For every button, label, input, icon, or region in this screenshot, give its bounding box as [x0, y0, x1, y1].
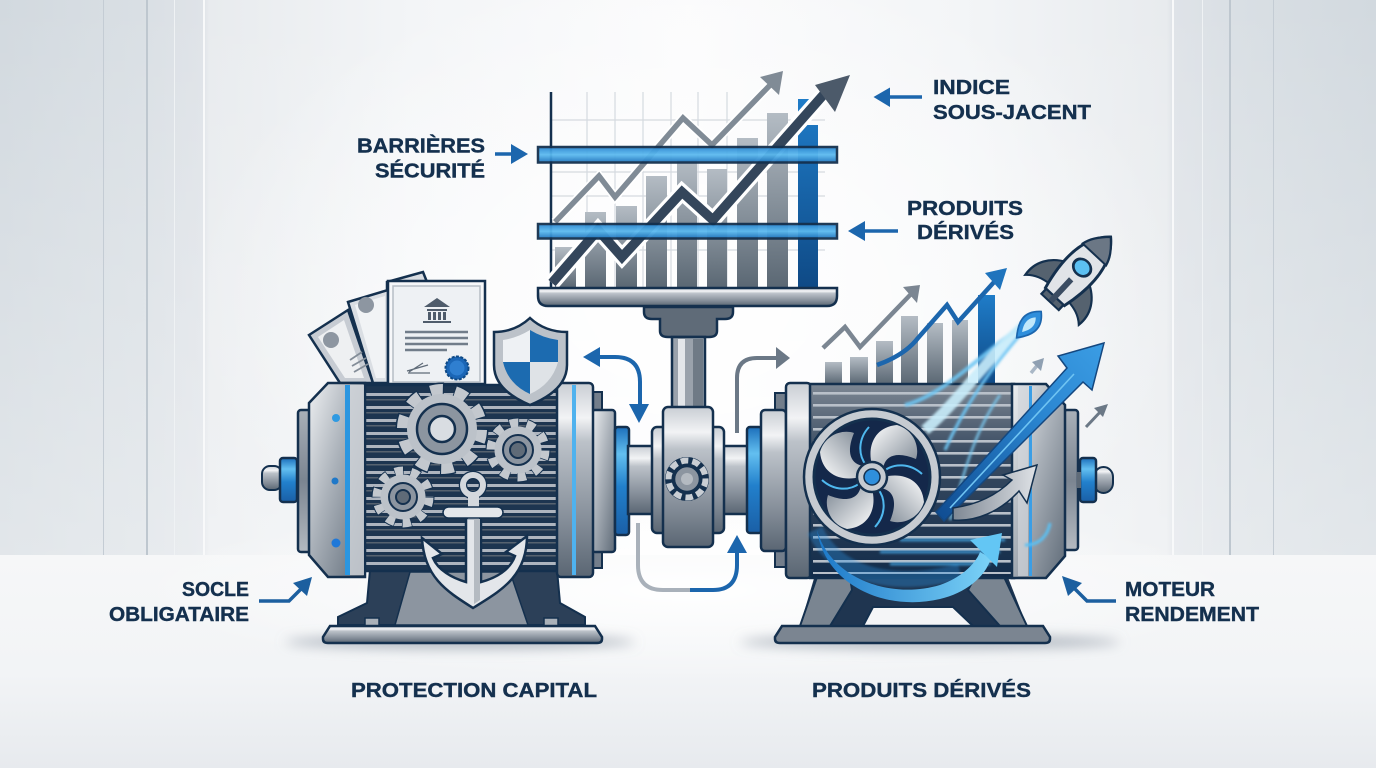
right inner blue collar of left engine — [615, 427, 629, 535]
arrow: indice — [874, 88, 922, 107]
label: indice sous-jacent — [933, 77, 1091, 124]
caption: protection capital: PROTECTION CAPITAL — [351, 680, 597, 702]
mini grey arrow — [823, 285, 920, 348]
upper safety barrier — [538, 147, 837, 162]
chart grid — [551, 92, 825, 287]
anchor — [422, 475, 527, 608]
base plate — [775, 626, 1050, 643]
outer plate — [298, 410, 312, 552]
mini blue arrow — [877, 268, 1007, 365]
left bell housing — [309, 383, 365, 577]
chart axis — [550, 92, 552, 287]
right engine: produits dérivés — [747, 212, 1138, 643]
mounting legs — [800, 575, 1027, 626]
arrow: socle — [259, 577, 312, 601]
label: barrières sécurité: BARRIÈRES — [357, 134, 485, 158]
label: produits dérivés (chart): DÉRIVÉS — [917, 221, 1014, 244]
window — [1070, 255, 1094, 280]
shaft nub — [262, 466, 282, 490]
right plate and nub — [1064, 410, 1113, 550]
arrow: barrières — [495, 144, 528, 164]
coupling gear — [665, 457, 709, 501]
mini bars — [825, 295, 995, 384]
left engine: protection capital — [262, 272, 615, 643]
grey curved arrow — [953, 465, 1037, 520]
circulation arrows — [583, 347, 790, 590]
air swooshes — [905, 320, 1050, 545]
label: indice sous-jacent: INDICE — [933, 77, 1010, 99]
bond documents — [309, 272, 485, 384]
mounting legs — [338, 570, 585, 626]
label: moteur rendement: MOTEUR — [1125, 579, 1216, 601]
central coupling — [628, 407, 748, 547]
floor — [0, 500, 1376, 768]
shaft — [628, 446, 748, 514]
label: indice sous-jacent: SOUS-JACENT — [933, 102, 1091, 124]
label: socle obligataire: OBLIGATAIRE — [109, 604, 249, 626]
fan hub — [857, 462, 887, 492]
inner coupling block — [663, 407, 713, 547]
dark derivative arrow — [552, 75, 850, 283]
central chart on platform — [538, 71, 850, 306]
label: produits dérivés (chart): PRODUITS — [907, 198, 1023, 220]
label: moteur rendement — [1125, 579, 1259, 626]
small accent arrows — [1031, 358, 1108, 427]
blue double arrow — [583, 347, 649, 423]
connecting column — [644, 307, 733, 408]
certificate — [388, 281, 485, 384]
blue collar — [280, 458, 297, 502]
label: produits dérivés (chart) — [907, 198, 1023, 244]
right bell — [1012, 384, 1065, 578]
finned body — [810, 384, 1014, 578]
rocket — [990, 212, 1138, 363]
finned body — [362, 385, 560, 571]
chart platform — [538, 288, 837, 306]
right bell housing — [557, 383, 615, 577]
blue air haze — [815, 530, 1005, 579]
label: barrières sécurité — [357, 134, 485, 182]
lower safety barrier — [538, 224, 837, 238]
medium gear — [491, 423, 545, 477]
shield — [494, 318, 567, 405]
arrow: produits dérivés — [848, 221, 898, 241]
fins — [1025, 247, 1069, 291]
caption: produits dérivés: PRODUITS DÉRIVÉS — [812, 679, 1031, 702]
label: socle obligataire — [109, 579, 249, 626]
large blue arrow — [936, 343, 1104, 521]
left bell — [786, 383, 811, 578]
label: moteur rendement: RENDEMENT — [1125, 604, 1259, 626]
label: socle obligataire: SOCLE — [182, 579, 249, 601]
base plate — [323, 626, 602, 643]
bottom return arrow — [638, 523, 747, 590]
fan — [804, 409, 940, 545]
label: barrières sécurité: SÉCURITÉ — [375, 160, 485, 182]
fan blades — [820, 425, 924, 529]
body — [1042, 225, 1124, 309]
grey top arrow — [737, 347, 790, 433]
bank icon — [423, 298, 451, 323]
flame — [1010, 305, 1048, 344]
large gear — [403, 390, 481, 468]
floor shadows under engines — [285, 635, 1120, 649]
small gear — [377, 471, 429, 523]
outer coupling block — [652, 427, 724, 533]
wax seal — [446, 356, 468, 380]
light blue curved arrow — [817, 530, 1002, 602]
mini growth chart above right engine — [823, 268, 1007, 384]
grey index arrow — [555, 71, 783, 222]
chart bars — [555, 99, 818, 287]
left plates — [747, 393, 787, 567]
arrow: moteur — [1062, 576, 1116, 601]
